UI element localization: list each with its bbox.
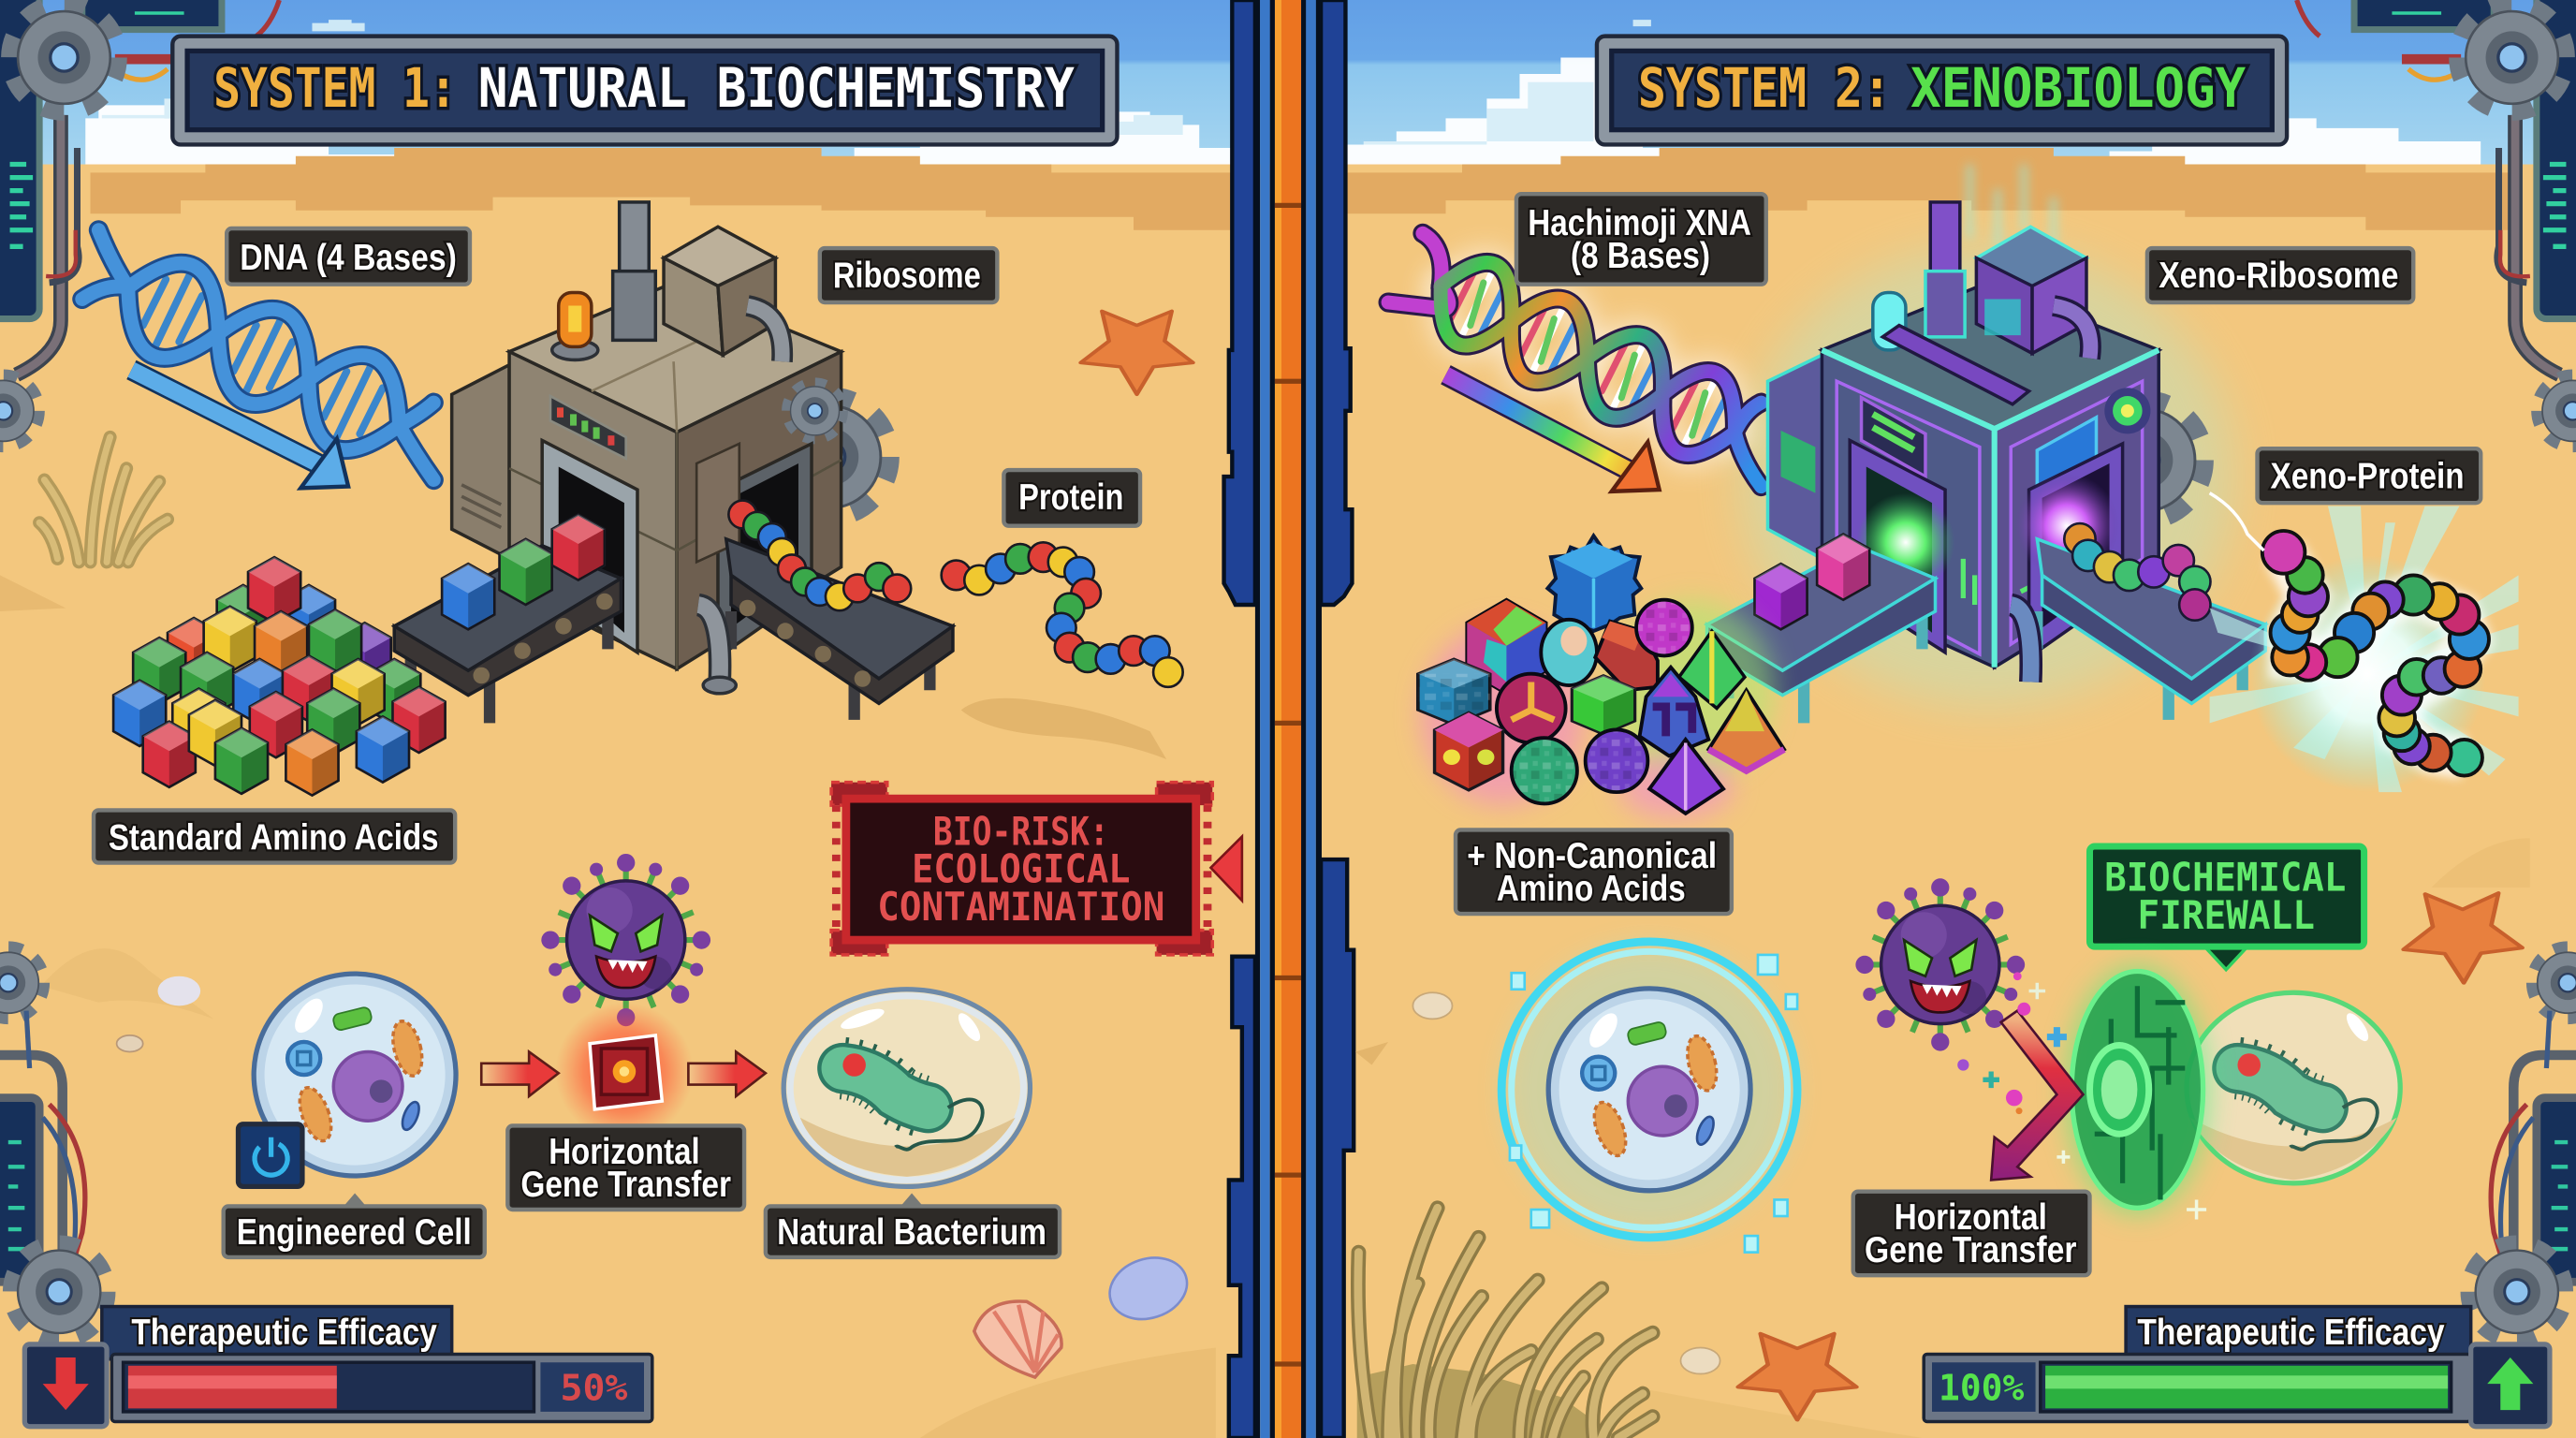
icon: rainbow XNA helix — [1388, 233, 1761, 487]
purple sphere — [1586, 729, 1647, 792]
orange pyramid — [1708, 690, 1784, 770]
icon: standard amino acid pile — [113, 557, 446, 796]
gauge: therapeutic efficacy right — [1924, 1307, 2550, 1427]
glowing doors — [1850, 440, 2123, 657]
protein on belt — [728, 501, 911, 610]
icon: shielded engineered cell — [1501, 942, 1797, 1253]
label: Natural Bacterium — [766, 1193, 1060, 1257]
factory: xeno-ribosome machine — [1707, 165, 2265, 723]
title: System 1: SYSTEM 1: — [213, 56, 457, 120]
callout: biochemical firewall: FIREWALL — [2137, 892, 2315, 938]
arrow: bio-risk pointer — [1211, 837, 1242, 901]
rainbow cube — [1467, 600, 1546, 694]
red polyhedron — [1595, 622, 1658, 690]
center divider — [1224, 0, 1354, 1438]
label: Non-Canonical Amino Acids: Amino Acids — [1497, 869, 1686, 909]
bottom xeno pipe — [2011, 605, 2031, 682]
iridescent egg — [1541, 620, 1597, 685]
icon: pebbles right — [1355, 992, 1720, 1374]
orange cube — [1435, 712, 1503, 790]
gauge: therapeutic efficacy left — [24, 1307, 652, 1427]
icon: virus left — [541, 854, 710, 1026]
green cube — [1572, 675, 1635, 735]
purple pyramid — [1649, 740, 1723, 814]
icon: starfish top left panel — [1081, 311, 1193, 394]
icon: power button — [238, 1124, 302, 1186]
label: Standard Amino Acids: Standard Amino Acids — [109, 818, 439, 858]
label: Xeno-Protein — [2258, 448, 2481, 503]
label: DNA: DNA (4 Bases) — [240, 238, 457, 278]
icon: down arrow — [24, 1344, 107, 1427]
magenta ball — [1497, 674, 1566, 742]
bottom pipe — [698, 605, 736, 694]
arrow: blue flow — [131, 370, 348, 488]
factory: ribosome machine — [394, 202, 953, 723]
magenta sphere — [1636, 600, 1692, 655]
label: Horizontal Gene Transfer right: Gene Transfer — [1865, 1230, 2076, 1270]
callout: bio-risk — [831, 783, 1212, 955]
label: Ribosome: Ribosome — [833, 256, 981, 296]
icon: engineered cell — [238, 971, 459, 1186]
glow behind xeno factory — [1741, 246, 2234, 707]
icon: shells and pebbles left — [117, 976, 1195, 1377]
icon: gene chip — [555, 1003, 694, 1140]
label: Protein — [1003, 470, 1140, 526]
bar — [111, 1354, 652, 1421]
label tab — [102, 1307, 452, 1359]
label: Protein: Protein — [1018, 477, 1123, 518]
callout: biochemical firewall — [2089, 846, 2364, 970]
cubes on belt — [442, 514, 605, 629]
label: Hachimoji XNA: (8 Bases) — [1571, 236, 1710, 276]
icon: seaweed right — [1357, 1208, 1653, 1438]
label tab: Therapeutic Efficacy — [2137, 1313, 2445, 1353]
label: Natural Bacterium: Natural Bacterium — [777, 1212, 1046, 1253]
icon: DNA helix — [82, 230, 433, 480]
left xeno conveyor — [1707, 546, 1936, 723]
arrow: rainbow flow — [1445, 374, 1660, 492]
teal cube — [1418, 659, 1490, 725]
label: Xeno-Ribosome: Xeno-Ribosome — [2159, 256, 2398, 296]
right xeno conveyor — [2037, 539, 2265, 720]
label tab: Therapeutic Efficacy — [131, 1313, 437, 1353]
icon: virus right — [1855, 878, 2025, 1051]
title: System 2: SYSTEM 2: — [1638, 56, 1891, 120]
label: Hachimoji XNA: Hachimoji XNA — [1528, 203, 1751, 243]
label: Hachimoji XNA — [1516, 194, 1766, 285]
icon: starfish bottom — [1738, 1334, 1856, 1420]
label: Ribosome — [820, 248, 997, 302]
label: Horizontal Gene Transfer left: Horizontal — [549, 1132, 700, 1172]
green sphere — [1512, 738, 1577, 803]
screens on xeno factory — [1781, 388, 2150, 513]
title: System 1 — [172, 37, 1117, 144]
left annex — [1767, 355, 1822, 559]
icon: starfish right — [2385, 866, 2547, 993]
label: Xeno-Ribosome — [2147, 248, 2413, 302]
burst — [2210, 506, 2519, 792]
shield sparks — [1510, 955, 1797, 1253]
label: Engineered Cell: Engineered Cell — [237, 1212, 472, 1253]
label: Horizontal Gene Transfer right — [1853, 1192, 2089, 1275]
main body — [509, 283, 842, 668]
bar: 100% — [1939, 1368, 2024, 1410]
arrow: deflected gene transfer — [1991, 1011, 2083, 1180]
arrow: cell to gene — [481, 1051, 559, 1096]
top box, chimney, beacon and pipe — [552, 202, 783, 361]
label: Engineered Cell — [224, 1193, 485, 1257]
callout: bio-risk: BIO-RISK: — [933, 808, 1109, 854]
right machinery: gears, pipes and screens — [2297, 0, 2576, 1339]
left conveyor — [394, 546, 621, 723]
green pyramid — [1679, 631, 1745, 709]
label: Horizontal Gene Transfer left: Gene Transfer — [520, 1165, 731, 1205]
label: Horizontal Gene Transfer left — [507, 1125, 744, 1210]
label: DNA — [227, 228, 470, 285]
big gear behind ribosome — [771, 399, 887, 515]
label: Xeno-Protein: Xeno-Protein — [2271, 456, 2465, 496]
beads — [2284, 552, 2469, 757]
label: Horizontal Gene Transfer right: Horizontal — [1895, 1197, 2047, 1238]
sparks around firewall — [1957, 972, 2206, 1220]
big gear behind xeno-ribosome — [2086, 403, 2202, 518]
label: Standard Amino Acids — [94, 810, 455, 863]
icon: natural bacterium — [783, 990, 1030, 1186]
callout: bio-risk: ECOLOGICAL — [912, 846, 1131, 892]
icon: protein chain — [942, 542, 1183, 687]
icon: bacterium protected — [2187, 992, 2400, 1183]
icon: non-canonical amino acid pile — [1418, 536, 1784, 818]
top box, chimney, beacon — [1873, 202, 2090, 404]
icon: green firewall shield — [2065, 964, 2210, 1214]
blue crystal — [1640, 668, 1708, 756]
arrow: gene to bacterium — [688, 1051, 766, 1096]
doors — [542, 440, 812, 657]
icon: up arrow — [2471, 1344, 2550, 1427]
title: System 2 — [1597, 37, 2287, 144]
right conveyor — [726, 539, 953, 720]
left machinery: gears, pipes and screens — [0, 0, 279, 1339]
light beams — [1969, 165, 2054, 246]
xeno protein on belt — [2064, 523, 2210, 621]
left annex — [452, 365, 509, 559]
label: Non-Canonical Amino Acids: + Non-Canonical — [1467, 836, 1717, 876]
icon: seaweed left — [39, 437, 168, 562]
main body — [1822, 283, 2159, 668]
bar — [1924, 1354, 2471, 1421]
callout: bio-risk: CONTAMINATION — [877, 884, 1164, 930]
title: System 2: XENOBIOLOGY — [1910, 56, 2246, 120]
spiked crystal — [1547, 536, 1641, 631]
title: System 1: NATURAL BIOCHEMISTRY — [478, 56, 1075, 120]
xeno cubes on belt — [1754, 535, 1869, 629]
sparks — [2210, 493, 2264, 550]
bar: 50% — [560, 1368, 627, 1410]
small gear on factory — [787, 383, 842, 438]
control panel — [550, 396, 626, 459]
label: Non-Canonical Amino Acids — [1456, 829, 1732, 914]
callout: biochemical firewall: BIOCHEMICAL — [2104, 854, 2346, 900]
icon: xeno-protein chain with burst — [2210, 493, 2519, 792]
